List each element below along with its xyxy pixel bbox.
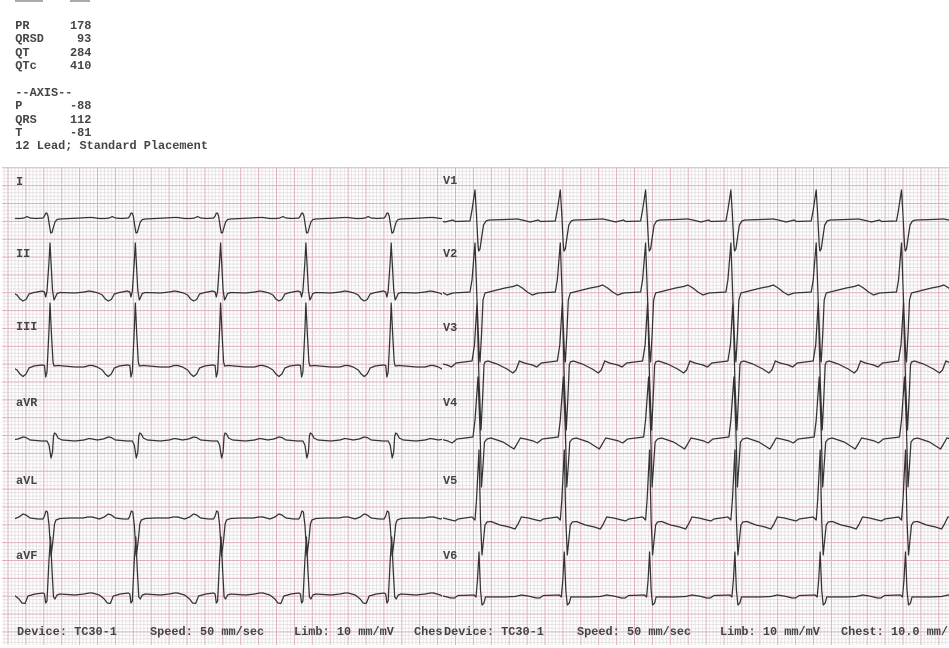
axis text block: 112 xyxy=(70,113,91,127)
footer settings: limb panel: Limb: 10 mm/mV xyxy=(294,625,395,639)
precordial lead labels: V3 xyxy=(443,321,457,335)
footer settings: limb panel: Ches xyxy=(414,625,443,639)
lead aVR trace xyxy=(7,433,519,458)
lead placement note: 12 Lead; Standard Placement xyxy=(15,139,208,153)
limb lead labels: aVR xyxy=(16,396,38,410)
measurements text block: 284 xyxy=(70,46,91,60)
lead III trace xyxy=(15,302,442,378)
footer settings: limb panel xyxy=(17,625,443,639)
footer settings: precordial panel: Chest: 10.0 mm/ xyxy=(841,625,948,639)
limb lead labels: III xyxy=(16,320,37,334)
lead V5 trace xyxy=(436,450,949,555)
precordial lead labels: V1 xyxy=(443,174,457,188)
measurements text block: QTc xyxy=(15,59,37,73)
axis text block xyxy=(15,86,91,140)
limb lead labels: aVF xyxy=(16,549,37,563)
measurements text block: PR xyxy=(15,19,30,33)
lead V1 trace xyxy=(432,190,949,251)
precordial lead labels: V6 xyxy=(443,549,457,563)
ECG grid paper xyxy=(2,167,949,645)
lead II trace xyxy=(15,242,442,302)
axis text block: --AXIS-- xyxy=(15,86,72,100)
lead V2 trace xyxy=(432,243,949,362)
footer settings: precordial panel xyxy=(444,625,948,639)
precordial lead labels: V5 xyxy=(443,474,457,488)
precordial lead labels: V4 xyxy=(443,396,457,410)
footer settings: precordial panel: Speed: 50 mm/sec xyxy=(577,625,691,639)
limb lead labels: I xyxy=(16,175,23,189)
measurements text block: QT xyxy=(15,46,30,60)
measurements text block: 178 xyxy=(70,19,91,33)
measurements text block: QRSD xyxy=(15,32,44,46)
lead V4 trace xyxy=(435,377,949,487)
measurements text block xyxy=(15,0,91,73)
measurements text block: 410 xyxy=(70,59,91,73)
axis text block: T xyxy=(15,126,22,140)
limb lead labels xyxy=(16,175,38,563)
precordial lead labels xyxy=(443,174,457,563)
measurements text block: 93 xyxy=(77,32,91,46)
lead aVF trace xyxy=(15,536,442,604)
footer settings: precordial panel: Device: TC30-1 xyxy=(444,625,544,639)
footer settings: limb panel: Device: TC30-1 xyxy=(17,625,117,639)
lead V3 trace xyxy=(434,303,949,430)
lead V6 trace xyxy=(436,552,949,605)
limb lead labels: II xyxy=(16,247,30,261)
footer settings: precordial panel: Limb: 10 mm/mV xyxy=(720,625,821,639)
limb lead labels: aVL xyxy=(16,474,37,488)
axis text block: -88 xyxy=(70,99,91,113)
axis text block: -81 xyxy=(70,126,91,140)
precordial lead traces panel xyxy=(432,190,949,605)
lead aVL trace xyxy=(15,510,442,557)
limb lead traces panel xyxy=(15,212,442,604)
footer settings: limb panel: Speed: 50 mm/sec xyxy=(150,625,264,639)
precordial lead labels: V2 xyxy=(443,247,457,261)
axis text block: QRS xyxy=(15,113,37,127)
lead I trace xyxy=(7,213,519,233)
axis text block: P xyxy=(15,99,22,113)
